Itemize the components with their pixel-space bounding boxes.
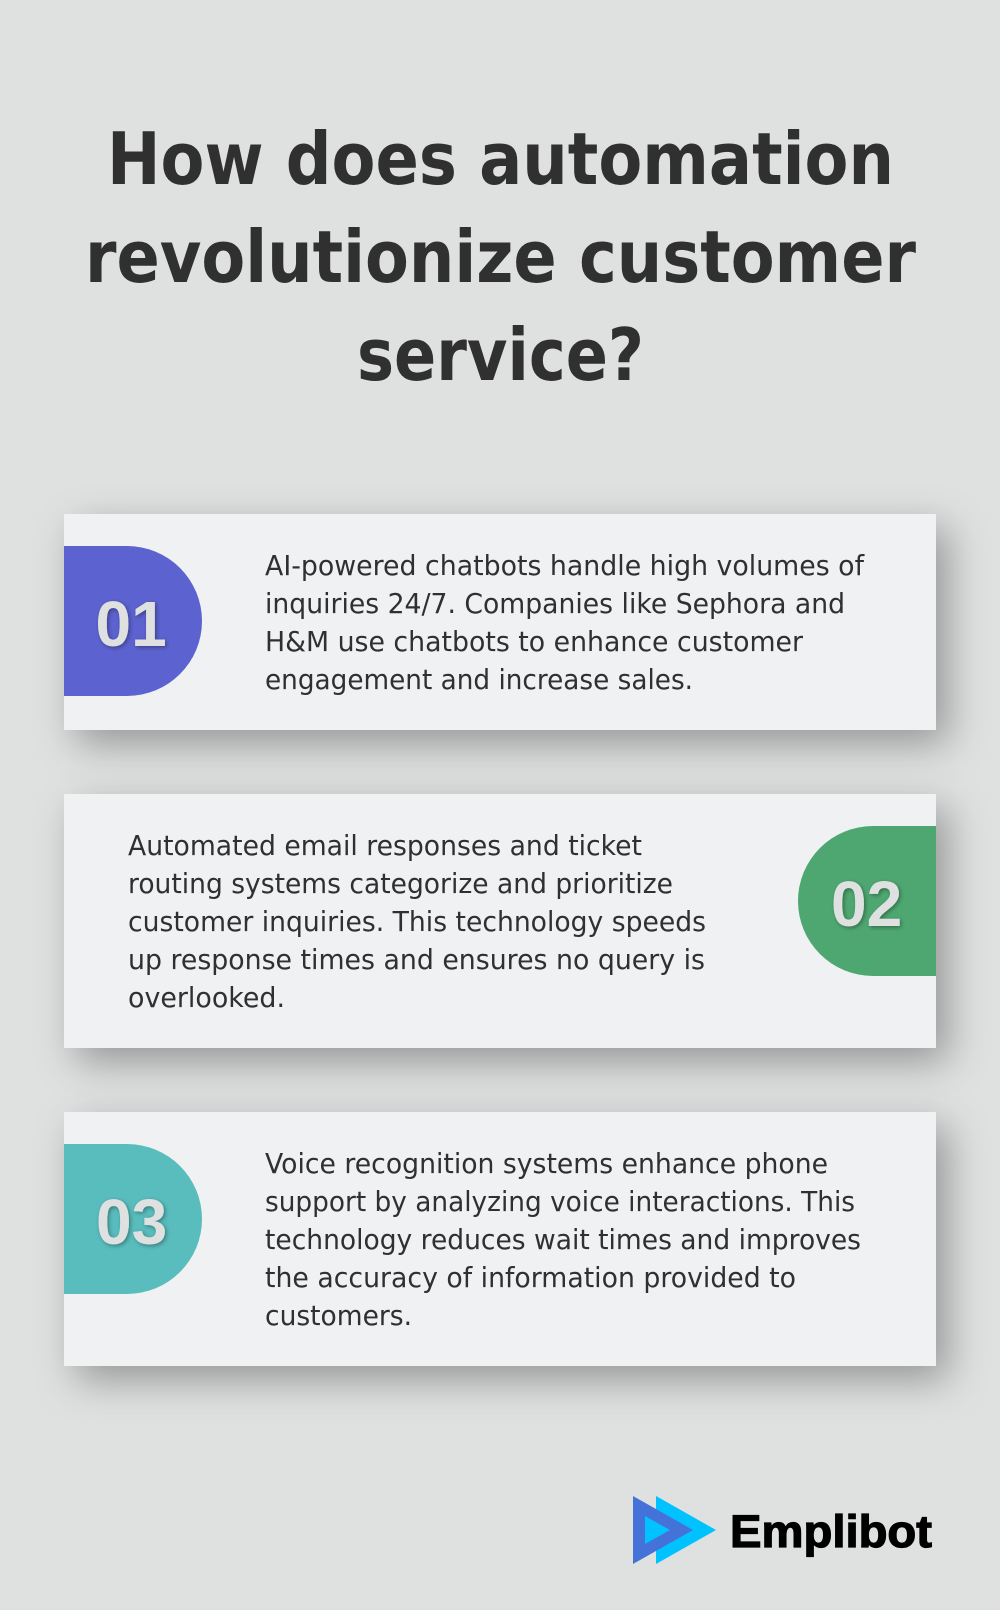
text: chatbots: AI-powered chatbots handle high volumes of xyxy=(265,549,865,582)
text: chatbots: H&M use chatbots to enhance customer xyxy=(265,625,803,658)
text: voice recognition: the accuracy of information provided to xyxy=(265,1261,796,1294)
text: chatbots xyxy=(265,549,865,696)
card background xyxy=(64,794,936,1048)
text: email routing: overlooked. xyxy=(128,981,285,1014)
text: email routing: customer inquiries. This technology speeds xyxy=(128,905,706,938)
number badge 02: 02 xyxy=(831,868,902,940)
card background xyxy=(64,1112,936,1366)
text: voice recognition: support by analyzing voice interactions. This xyxy=(265,1185,855,1218)
number badge 01: 01 xyxy=(96,588,167,660)
text: voice recognition: technology reduces wait times and improves xyxy=(265,1223,861,1256)
text: voice recognition: customers. xyxy=(265,1299,412,1332)
text: voice recognition: Voice recognition systems enhance phone xyxy=(265,1147,828,1180)
text: email routing: Automated email responses and ticket xyxy=(128,829,642,862)
title: service? xyxy=(357,313,644,397)
number badge 02 xyxy=(798,826,936,976)
title xyxy=(85,117,916,397)
text: chatbots: engagement and increase sales. xyxy=(265,663,693,696)
card background xyxy=(64,514,936,730)
icon: play triangles xyxy=(633,1496,716,1564)
text: email routing: routing systems categorize and prioritize xyxy=(128,867,673,900)
number badge 01 xyxy=(64,546,202,696)
text: email routing: up response times and ensures no query is xyxy=(128,943,705,976)
number badge 03 xyxy=(64,1144,202,1294)
title: revolutionize customer xyxy=(85,215,916,299)
logo: Emplibot xyxy=(633,1496,932,1564)
panel: step 03 xyxy=(64,1112,936,1366)
text: voice recognition xyxy=(265,1147,861,1332)
panel: step 02 xyxy=(64,794,936,1048)
panel: step 01 xyxy=(64,514,936,730)
text: chatbots: inquiries 24/7. Companies like Sephora and xyxy=(265,587,845,620)
wordmark: Emplibot xyxy=(730,1506,932,1557)
title: How does automation xyxy=(107,117,894,201)
number badge 03: 03 xyxy=(96,1186,167,1258)
text: email routing xyxy=(128,829,706,1014)
